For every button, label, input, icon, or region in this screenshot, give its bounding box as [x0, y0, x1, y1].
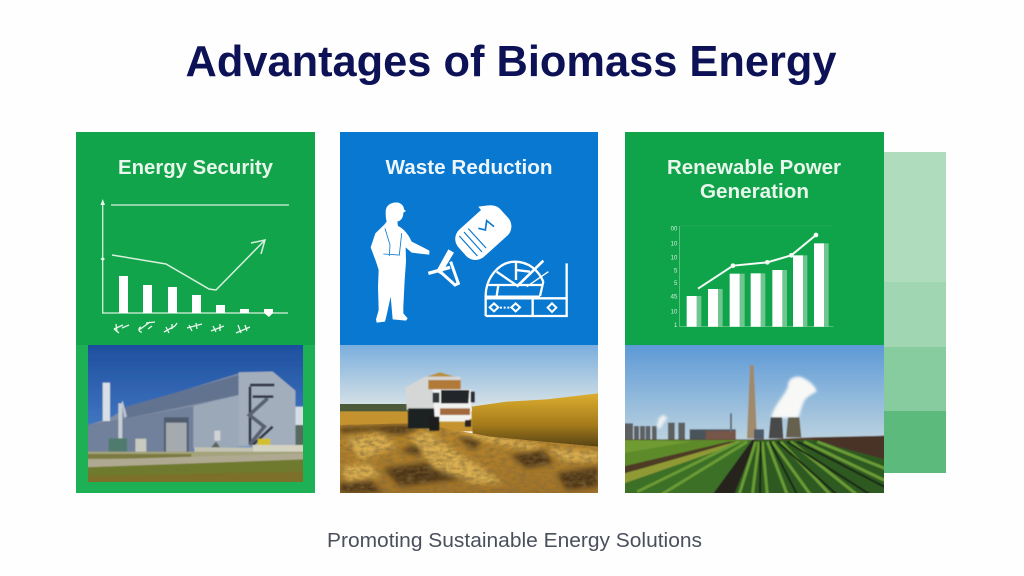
panel: energy security: [76, 132, 315, 493]
chart: energy security trend: [100, 199, 289, 333]
photo: biomass plant building: [86, 343, 305, 484]
title: Advantages of Biomass Energy: [186, 37, 837, 86]
side panel: stacked green bands: [884, 152, 946, 473]
icon: worker silhouette: [371, 202, 429, 323]
heading: renewable power generation: Generation: [700, 181, 809, 203]
photo: straw field with truck: [340, 345, 598, 493]
chart: renewable power growth: 1: [674, 323, 678, 329]
chart: renewable power growth: 10: [671, 241, 678, 247]
chart: renewable power growth: [671, 226, 833, 329]
chart: renewable power growth: 00: [671, 227, 678, 233]
icon: tool and sack: [428, 200, 517, 285]
panel: renewable power generation: [622, 132, 887, 495]
chart: renewable power growth: 5: [674, 269, 678, 275]
chart: renewable power growth: 10: [671, 310, 678, 316]
chart: renewable power growth: 10: [671, 256, 678, 262]
panel: waste reduction: [340, 132, 598, 493]
heading: energy security: Energy Security: [118, 157, 274, 179]
heading: renewable power generation: Renewable Power: [667, 157, 841, 179]
chart: renewable power growth: 45: [671, 295, 678, 301]
chart: renewable power growth: 5: [674, 281, 678, 287]
photo: power plant and crop fields: [622, 343, 887, 495]
footer tagline: Promoting Sustainable Energy Solutions: [327, 530, 702, 552]
heading: waste reduction: Waste Reduction: [386, 157, 552, 179]
icon: waste processing machine: [486, 261, 567, 316]
